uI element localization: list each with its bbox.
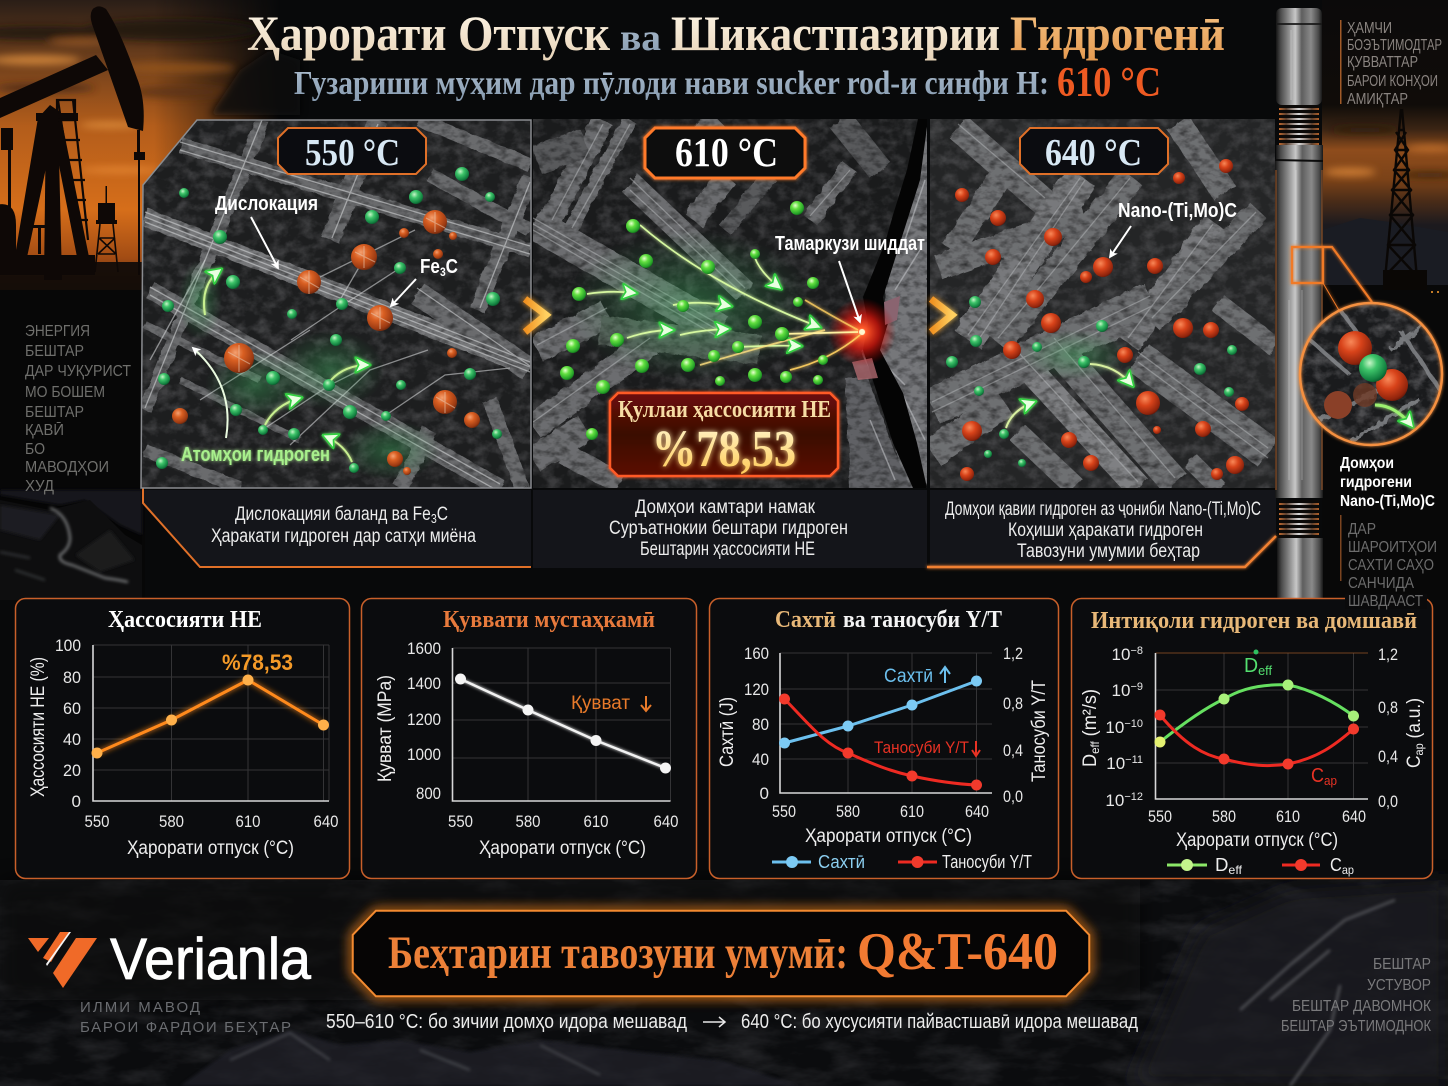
- microstructure 610 °C: [533, 118, 928, 490]
- label: Fe3C: C: [446, 256, 458, 278]
- chart: hydrogen diffusion and traps: 10: [1105, 791, 1124, 810]
- chart: hydrogen diffusion and traps: (a.u.): [1404, 698, 1425, 743]
- chart: toughness and Y/T ratio: Таносуби Y/T: [942, 852, 1032, 872]
- chart: toughness and Y/T ratio: 1,2: [1003, 644, 1023, 663]
- chart: hydrogen diffusion and traps: eff: [1258, 663, 1272, 678]
- hydrogen atoms 610 °C: [560, 201, 828, 440]
- left side note: ХУД: [25, 478, 54, 495]
- background: dark rocky terrain: [0, 880, 1448, 1086]
- callout: peak HE sensitivity: %78,53: [652, 421, 796, 478]
- subtitle: 610 °C: [1057, 60, 1161, 106]
- frame 610 °C: [533, 117, 927, 119]
- caption 550 °C: 3: [431, 511, 437, 526]
- chart: toughness and Y/T ratio: 160: [744, 644, 769, 663]
- chart: hydrogen diffusion and traps: C: [1311, 765, 1325, 787]
- callout: peak HE sensitivity: Қуллаи ҳассосияти HE: [618, 397, 831, 423]
- caption 610 °C: Домҳои камтари намак: [635, 497, 816, 518]
- label: dislocation: Дислокация: [215, 193, 318, 215]
- label: dislocation: [215, 193, 318, 268]
- chart: tensile strength: 1000: [407, 745, 441, 764]
- conclusion note: 640 °C: бо хусусияти пайвастшавӣ идора мешавад: [741, 1011, 1138, 1033]
- microstructure 640 °C: [928, 118, 1276, 490]
- left side note: [25, 323, 131, 495]
- chart: hydrogen diffusion and traps: eff: [1088, 741, 1102, 754]
- badge 550 °C: [278, 128, 426, 174]
- label: hydrogen atoms: Атомҳои гидроген: [181, 444, 330, 466]
- chart: tensile strength: 580: [516, 812, 540, 831]
- trapping arrows: [1006, 364, 1132, 428]
- chart: toughness and Y/T ratio: 120: [744, 680, 769, 699]
- chart: hydrogen diffusion and traps: eff: [1228, 863, 1243, 877]
- chart: hydrogen diffusion and traps: 0,4: [1378, 747, 1398, 766]
- title: Гидрогенӣ: [1010, 5, 1225, 61]
- chart: toughness and Y/T ratio: 610: [900, 802, 924, 821]
- title: [247, 5, 1225, 61]
- left side note: ҚАВӢ: [25, 421, 64, 439]
- chart: HE sensitivity: 20: [63, 761, 81, 780]
- hydrogen atoms 640 °C: [946, 296, 1237, 467]
- chart: hydrogen diffusion and traps: 10: [1112, 681, 1130, 700]
- chart: toughness and Y/T ratio: 80: [752, 715, 769, 734]
- label: stress concentration: [775, 233, 925, 322]
- arrow: 610 to 640: [931, 299, 952, 332]
- chart: hydrogen diffusion and traps: 10: [1105, 718, 1124, 737]
- badge 610 °C: 610 °C: [675, 129, 778, 175]
- chart: toughness and Y/T ratio: ва таносуби Y/T: [843, 607, 1002, 633]
- frame 640 °C: [927, 117, 1276, 119]
- left side note: БЕШТАР: [25, 404, 84, 421]
- chart: hydrogen diffusion and traps: D: [1080, 753, 1101, 767]
- chart: toughness and Y/T ratio: Таносуби Y/T: [1029, 680, 1050, 782]
- chart: toughness and Y/T ratio: Ҳарорати отпуск (°C): [805, 826, 972, 847]
- frame 550 °C: [141, 120, 531, 488]
- conclusion banner: [353, 911, 1089, 996]
- chart: hydrogen diffusion and traps: 0,8: [1378, 698, 1398, 717]
- chart: toughness and Y/T ratio: 0,0: [1003, 787, 1023, 806]
- chart: hydrogen diffusion and traps: D: [1244, 655, 1258, 677]
- label: Nano-(Ti,Mo)C: Nano-(Ti,Mo)C: [1118, 200, 1237, 222]
- chart: hydrogen diffusion and traps: ap: [1412, 743, 1426, 755]
- caption 610 °C: [531, 490, 927, 568]
- panel: 550 °C: [140, 118, 532, 568]
- arrow: 550 to 610: [525, 299, 546, 332]
- chart: hydrogen diffusion and traps: −11: [1125, 754, 1143, 766]
- left side note: МО БОШЕМ: [25, 384, 105, 401]
- chart: hydrogen diffusion and traps: (m²/s): [1080, 689, 1101, 741]
- chart: HE sensitivity: 100: [55, 636, 81, 655]
- chart: toughness and Y/T ratio: 0: [760, 784, 769, 803]
- chart: toughness and Y/T ratio: Таносуби Y/T: [874, 738, 969, 757]
- label: Nano-(Ti,Mo)C hydrogen traps: Домҳои: [1340, 455, 1394, 472]
- chart: tensile strength: 640: [654, 812, 678, 831]
- chart: hydrogen diffusion and traps: 0,0: [1378, 792, 1398, 811]
- chart: toughness and Y/T ratio: Сахтӣ: [884, 666, 933, 687]
- chart: hydrogen diffusion and traps: C: [1330, 855, 1343, 875]
- chart: HE sensitivity: 610: [236, 812, 260, 831]
- chart: hydrogen diffusion and traps: 550: [1148, 807, 1172, 826]
- panel: 610 °C: [531, 118, 928, 568]
- label: Fe3C: [391, 256, 458, 306]
- chart: hydrogen diffusion and traps: 10: [1112, 645, 1130, 664]
- converging hydrogen streams: [587, 225, 860, 370]
- chart: hydrogen diffusion and traps: Ҳарорати отпуск (°C): [1176, 830, 1338, 851]
- right side note: top: ҲАМЧИ: [1347, 20, 1392, 37]
- conclusion note: [326, 1011, 1138, 1033]
- title: Шикастпазирии: [671, 5, 1000, 61]
- chart: tensile strength: Қувват (MPa): [375, 675, 396, 782]
- chart: HE sensitivity: Ҳарорати отпуск (°C): [127, 838, 294, 859]
- chart: tensile strength: 800: [416, 784, 441, 803]
- logo tagline: ИЛМИ МАВОД: [80, 999, 200, 1016]
- caption 640 °C: Тавозуни умумии беҳтар: [1017, 541, 1200, 562]
- right side note: bottom: [1340, 515, 1437, 610]
- badge 640 °C: [1020, 128, 1168, 174]
- chart: hydrogen diffusion and traps: −9: [1130, 681, 1143, 693]
- magnifier: hydrogen trap lens: [1300, 303, 1442, 445]
- label: Fe3C: 3: [440, 265, 446, 279]
- panel: 640 °C: [927, 118, 1276, 568]
- chart: toughness and Y/T ratio: Сахтӣ: [818, 852, 865, 872]
- caption 550 °C: Ҳаракати гидроген дар сатҳи миёна: [211, 526, 476, 547]
- callout: peak HE sensitivity: [610, 393, 838, 478]
- chart: toughness and Y/T ratio: Сахтӣ: [775, 607, 836, 633]
- chart: HE sensitivity: 40: [63, 730, 81, 749]
- chart: toughness and Y/T ratio: [710, 598, 1058, 878]
- hydrogen atoms 550 °C: [156, 167, 502, 473]
- chart: hydrogen diffusion and traps: D: [1215, 855, 1228, 875]
- chart: hydrogen diffusion and traps: C: [1404, 754, 1425, 768]
- background: left rocks and stream: [0, 490, 142, 600]
- chart: hydrogen diffusion and traps: ap: [1324, 773, 1337, 788]
- conclusion note: 550–610 °C: бо зичии домҳо идора мешавад: [326, 1011, 687, 1033]
- Nano-(Ti,Mo)C atoms: [955, 159, 1249, 481]
- chart: HE sensitivity: Ҳассосияти HE (%): [28, 657, 49, 797]
- chart: tensile strength: 1400: [407, 674, 441, 693]
- sucker rod: [1275, 8, 1323, 598]
- chart: HE sensitivity: 640: [314, 812, 338, 831]
- chart: HE sensitivity: 60: [63, 699, 81, 718]
- caption 610 °C: Бештарин ҳассосияти HE: [640, 539, 815, 560]
- caption 640 °C: [927, 490, 1276, 568]
- chart: tensile strength: 550: [448, 812, 473, 831]
- right side note: top: [1340, 20, 1442, 108]
- chart: hydrogen diffusion and traps: Интиқоли гидроген ва домшавӣ: [1091, 608, 1417, 634]
- chart: HE sensitivity: 550: [84, 812, 110, 831]
- chart: HE sensitivity: Ҳассосияти HE: [108, 607, 262, 633]
- chart: HE sensitivity: 0: [72, 792, 81, 811]
- caption 550 °C: Дислокацияи баланд ва Fe: [235, 504, 474, 525]
- chart: HE sensitivity: 80: [63, 668, 81, 687]
- chart: HE sensitivity: %78,53: [222, 650, 293, 675]
- conclusion banner: Беҳтарин тавозуни умумӣ:: [388, 927, 848, 979]
- chart: hydrogen diffusion and traps: 640: [1342, 807, 1366, 826]
- logo tagline: [80, 999, 291, 1036]
- caption 610 °C: Суръатнокии бештари гидроген: [609, 518, 848, 539]
- chart: toughness and Y/T ratio: 580: [836, 802, 860, 821]
- right side note: top: ҚУВВАТТАР: [1347, 54, 1418, 71]
- chart: HE sensitivity: [16, 598, 350, 878]
- bottom right note: БЕШТАР: [1373, 956, 1431, 973]
- label: Nano-(Ti,Mo)C hydrogen traps: [1340, 455, 1435, 510]
- badge 640 °C: 640 °C: [1045, 132, 1142, 174]
- left side note: МАВОДҲОИ: [25, 459, 109, 476]
- right side note: bottom: САНЧИДА: [1348, 575, 1414, 592]
- logo: Verianla: [28, 927, 312, 992]
- caption 640 °C: Коҳиши ҳаракати гидроген: [1008, 520, 1203, 541]
- caption 550 °C: C: [437, 504, 448, 525]
- chart: toughness and Y/T ratio: 0,4: [1003, 741, 1023, 760]
- chart: hydrogen diffusion and traps: 580: [1212, 807, 1236, 826]
- chart: tensile strength: Қуввати мустаҳкамӣ: [443, 607, 655, 633]
- label: hydrogen atoms: [181, 348, 330, 466]
- label: Fe3C: Fe: [420, 256, 443, 278]
- chart: tensile strength: 610: [584, 812, 608, 831]
- label: Nano-(Ti,Mo)C hydrogen traps: Nano-(Ti,Mo)C: [1340, 493, 1435, 510]
- chart: hydrogen diffusion and traps: 1,2: [1378, 645, 1398, 664]
- right side note: bottom: ДАР: [1348, 521, 1376, 538]
- left side note: БЕШТАР: [25, 343, 84, 360]
- left side note: ДАР ЧУҚУРИСТ: [25, 363, 131, 380]
- chart: tensile strength: Ҳарорати отпуск (°C): [479, 838, 646, 859]
- subtitle: Гузариши муҳим дар пӯлоди нави sucker rod-и синфи H:: [294, 65, 1049, 102]
- chart: toughness and Y/T ratio: Сахтӣ (J): [717, 697, 738, 767]
- chart: hydrogen diffusion and traps: 610: [1276, 807, 1300, 826]
- title: ва: [620, 17, 661, 59]
- bottom right note: [1281, 956, 1432, 1035]
- background: right sky and oil derrick: [1322, 0, 1448, 600]
- chart: hydrogen diffusion and traps: −12: [1124, 791, 1143, 803]
- microstructure 550 °C: [140, 118, 532, 492]
- label: Nano-(Ti,Mo)C hydrogen traps: гидрогени: [1340, 474, 1412, 491]
- chart: hydrogen diffusion and traps: −10: [1124, 718, 1143, 730]
- green diffusion arrows: [204, 270, 368, 462]
- conclusion banner: Q&T-640: [857, 923, 1058, 981]
- cracked metal: [845, 120, 928, 490]
- Fe3C atoms: [172, 210, 480, 475]
- chart: hydrogen diffusion and traps: ap: [1342, 863, 1354, 877]
- magnifier: rod zoom box and leader: [1292, 247, 1372, 312]
- background: sunset sky with pump jack: [0, 0, 276, 290]
- chart: tensile strength: 1600: [407, 639, 441, 658]
- badge 550 °C: 550 °C: [305, 132, 400, 174]
- title: Ҳарорати Отпуск: [247, 5, 610, 61]
- chart: toughness and Y/T ratio: 640: [965, 802, 989, 821]
- right side note: bottom: ШАВДААСТ: [1348, 593, 1423, 610]
- left side note: БО: [25, 441, 45, 458]
- label: stress concentration: Тамаркузи шиддат: [775, 233, 925, 255]
- logo: Verianla: Verianla: [110, 927, 312, 992]
- chart: hydrogen diffusion and traps: −8: [1130, 645, 1143, 657]
- chart: toughness and Y/T ratio: 40: [752, 750, 769, 769]
- chart: tensile strength: [362, 598, 696, 878]
- chart: HE sensitivity: 580: [159, 812, 184, 831]
- chart: hydrogen diffusion and traps: 10: [1106, 754, 1125, 773]
- caption 550 °C: [143, 488, 531, 568]
- logo tagline: БАРОИ ФАРДОИ БЕҲТАР: [80, 1019, 291, 1036]
- chart: toughness and Y/T ratio: 550: [772, 802, 796, 821]
- label: Nano-(Ti,Mo)C: [1110, 200, 1237, 257]
- chart: toughness and Y/T ratio: 0,8: [1003, 694, 1023, 713]
- chart: hydrogen diffusion and traps: [1072, 598, 1432, 878]
- chart: tensile strength: Қувват: [571, 693, 630, 714]
- bottom right note: УСТУВОР: [1367, 977, 1431, 994]
- right side note: top: АМИҚТАР: [1347, 91, 1408, 108]
- badge 610 °C: [645, 128, 805, 178]
- chart: tensile strength: 1200: [407, 710, 441, 729]
- left side note: ЭНЕРГИЯ: [25, 323, 90, 340]
- caption 640 °C: Домҳои қавии гидроген аз ҷониби Nano-(Ti,Mo)C: [945, 499, 1261, 520]
